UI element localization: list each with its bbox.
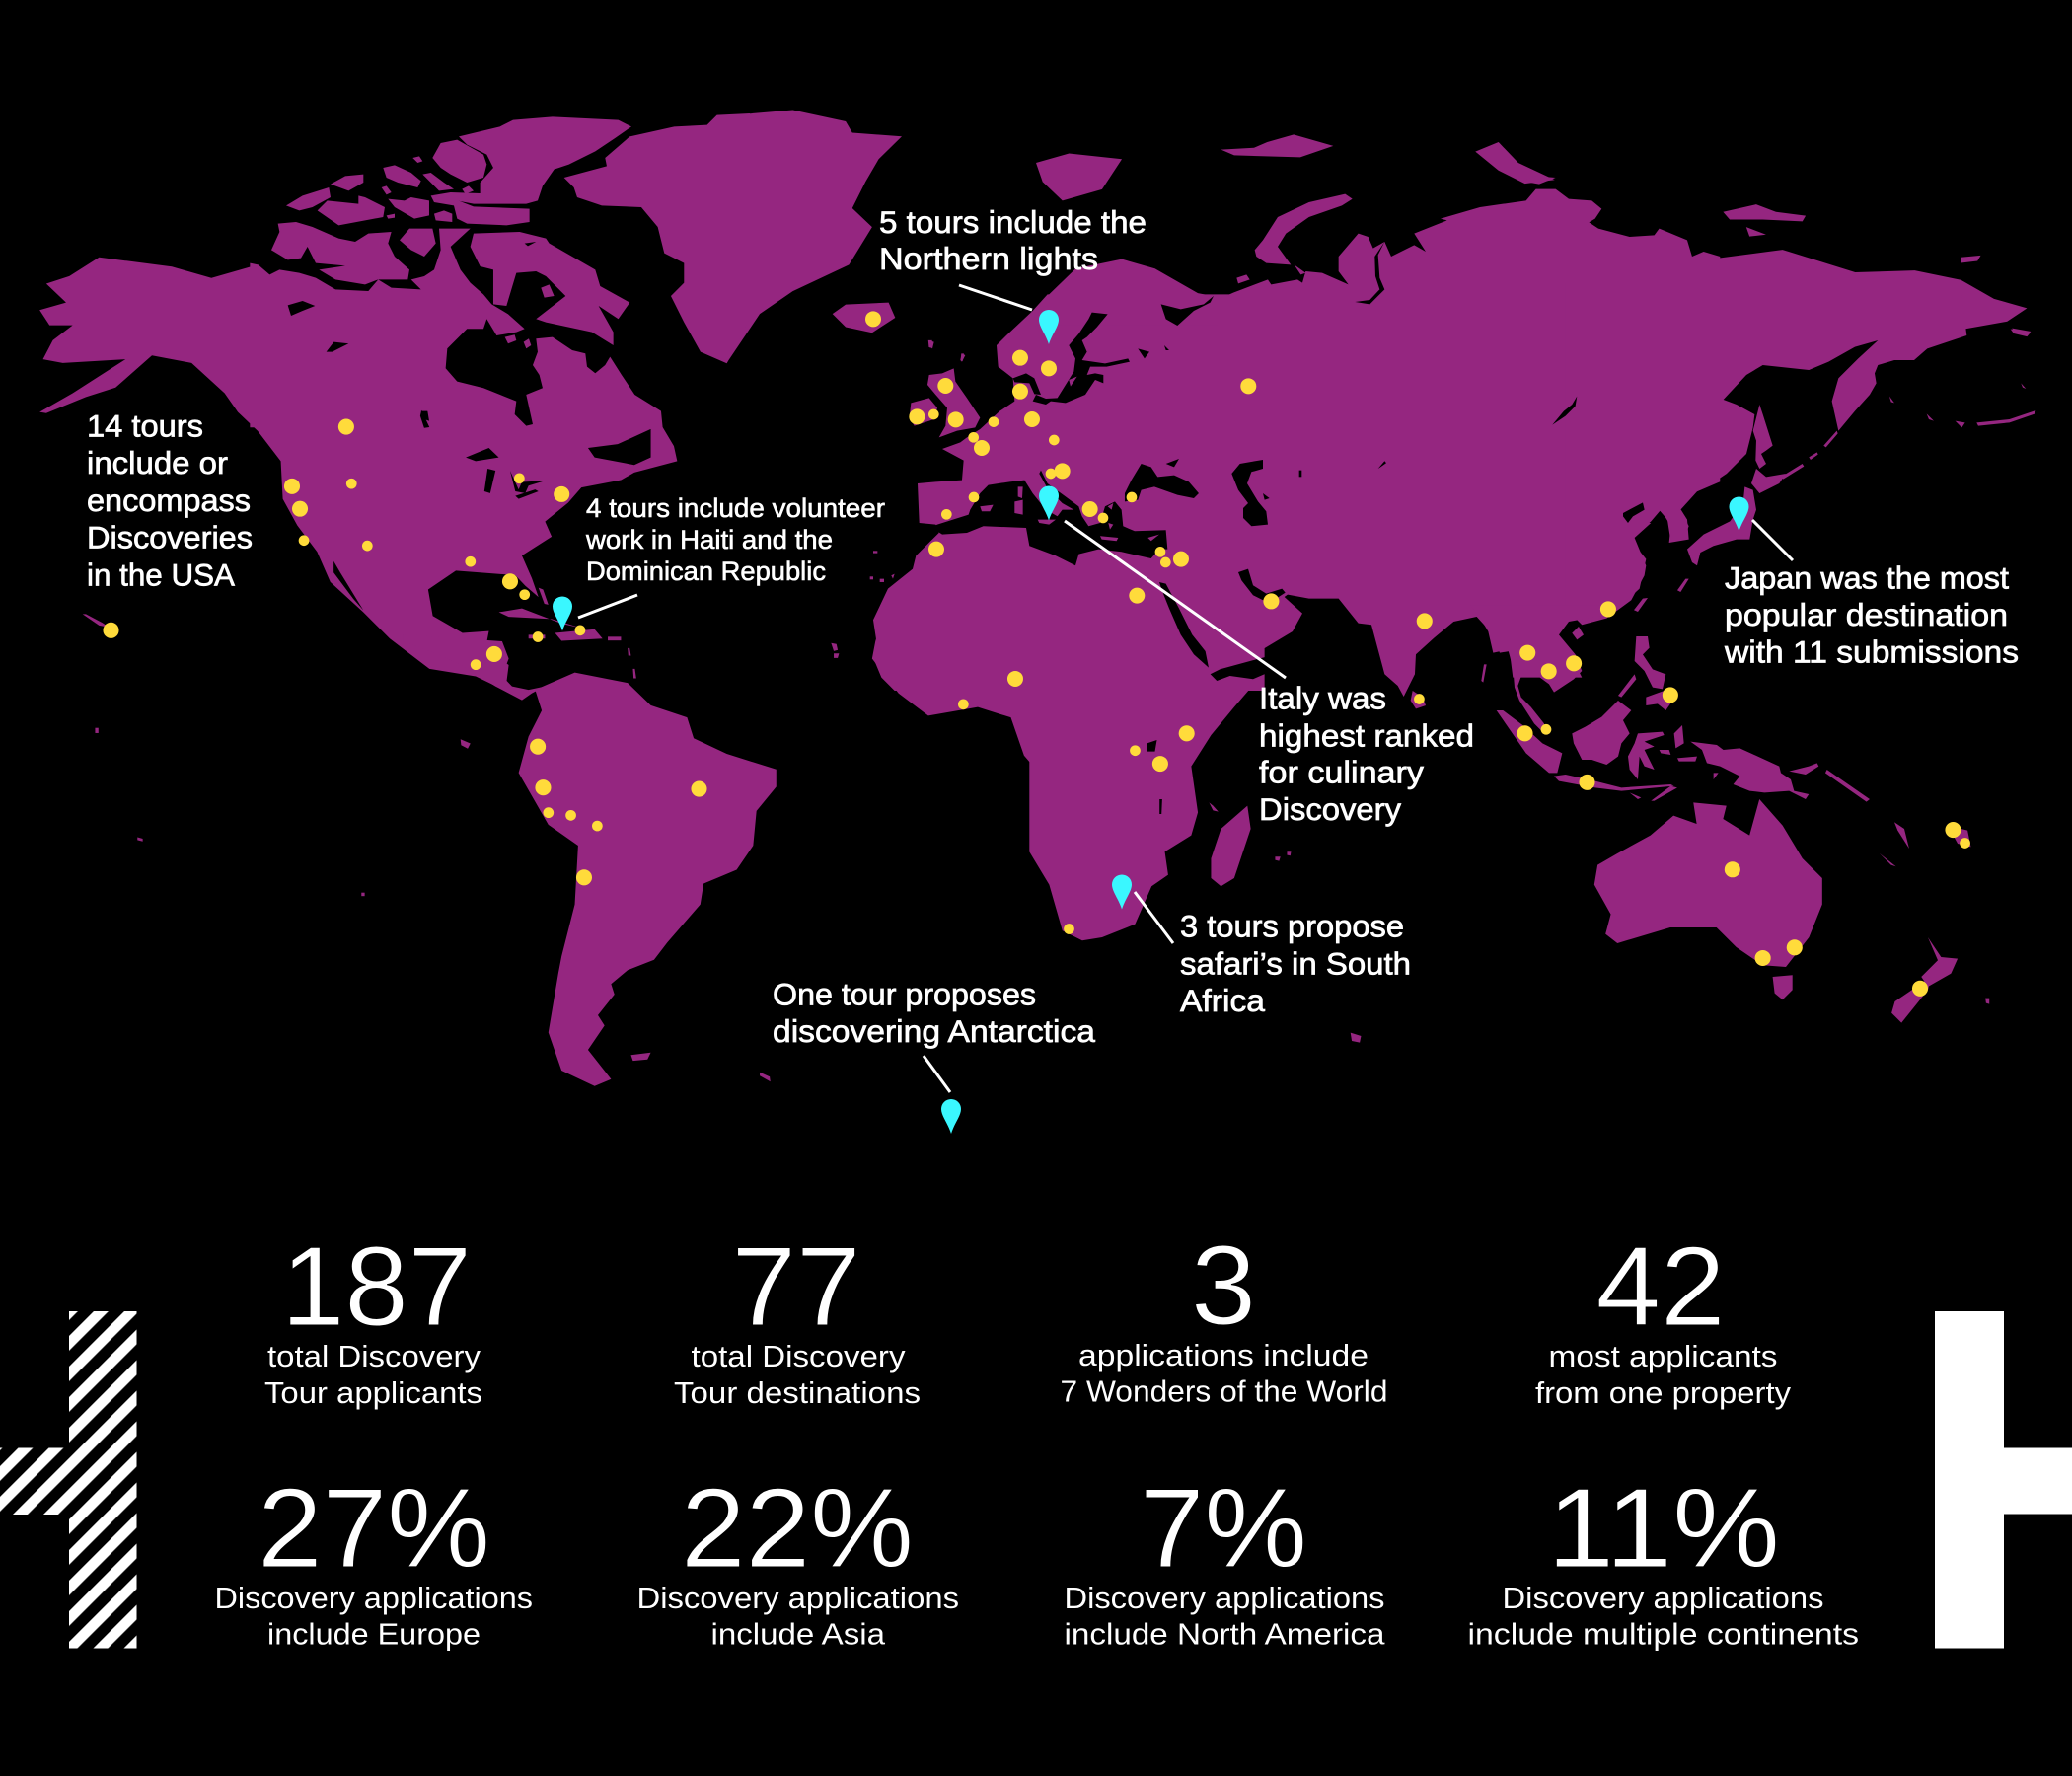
callout: South Africa: Africa: [1180, 983, 1266, 1018]
stat: 27% Europe: 27%: [258, 1466, 490, 1591]
callout: South Africa: [1112, 874, 1411, 1018]
callout: Japan: Japan was the most: [1725, 560, 2009, 596]
stat: 7% North America: 7%: [1140, 1466, 1307, 1591]
dots: Americas, Africa, Asia, Oceania: [103, 419, 1970, 997]
stat: 11% multiple continents: [1468, 1466, 1859, 1652]
small Mediterranean islands and Gotland: [980, 377, 1159, 541]
Yellow Sea detail: [1623, 502, 1645, 523]
callout: Japan: with 11 submissions: [1724, 633, 2019, 669]
callout: Northern lights: [879, 204, 1147, 344]
callout: USA: Discoveries: [87, 519, 253, 555]
Southeast Asia and Indonesia: [1470, 605, 1909, 866]
main Asia: [1217, 176, 1720, 697]
callout: USA: in the USA: [87, 556, 235, 592]
stat: 3 Wonders: applications include: [1078, 1339, 1369, 1372]
callout: USA: encompass: [87, 482, 251, 518]
callout: Haiti and Dominican Republic: work in Haiti and the: [585, 525, 833, 555]
callout: South Africa: 3 tours propose: [1180, 908, 1404, 943]
callout: Haiti and Dominican Republic: 4 tours include volunteer: [586, 493, 885, 523]
callout: Antarctica: discovering Antarctica: [773, 1013, 1096, 1049]
stat: 7% North America: Discovery applications: [1064, 1582, 1385, 1615]
stat: 42 from one property: from one property: [1535, 1376, 1792, 1410]
Far East, Japan: [1566, 283, 2035, 612]
African lake: [1147, 740, 1162, 814]
stat: 3 Wonders: 3: [1191, 1223, 1256, 1349]
land masses: [39, 110, 2035, 1086]
callout: Antarctica: One tour proposes: [773, 977, 1036, 1012]
North America mainland and Greenland east: [39, 110, 964, 691]
callout: Antarctica: [773, 977, 1096, 1134]
stat: 3 Wonders: [1060, 1223, 1387, 1409]
stat: 187 applicants: [264, 1224, 482, 1410]
callout: Northern lights: Northern lights: [879, 241, 1098, 276]
callout: Italy: highest ranked: [1259, 718, 1474, 754]
east Africa, Madagascar, Australia south, New Zealand: [1029, 641, 1989, 1043]
callout: Northern lights: 5 tours include the: [879, 204, 1147, 240]
Asia inland seas and gulfs: [1231, 242, 1577, 600]
stat: 77 destinations: total Discovery: [691, 1340, 906, 1373]
stat: 42 from one property: most applicants: [1549, 1340, 1778, 1373]
callout: USA: [87, 408, 253, 592]
statistics: [215, 1223, 1859, 1652]
seas and lakes: [288, 242, 1645, 814]
stat: 42 from one property: 42: [1596, 1224, 1725, 1350]
North America lakes and gulfs: [333, 410, 651, 611]
stat: 27% Europe: Discovery applications: [215, 1582, 533, 1615]
stat: 22% Asia: include Asia: [710, 1618, 885, 1652]
callout: South Africa: safari’s in South: [1180, 945, 1411, 981]
stat: 187 applicants: total Discovery: [267, 1340, 481, 1373]
stat: 22% Asia: [637, 1466, 959, 1652]
stat: 77 destinations: Tour destinations: [674, 1376, 921, 1410]
stat: 22% Asia: 22%: [681, 1466, 914, 1591]
callout: USA: include or: [87, 445, 228, 481]
Scandinavia north and far north-east Siberia, Arctic islands: [1036, 134, 2031, 336]
stat: 22% Asia: Discovery applications: [637, 1582, 959, 1615]
stat: 11% multiple continents: include multiple continents: [1468, 1618, 1859, 1652]
stat: 7% North America: include North America: [1064, 1618, 1385, 1652]
dots: Europe and Middle East: [865, 311, 1256, 687]
Canada lakes: [288, 242, 536, 421]
stat: 187 applicants: 187: [281, 1224, 472, 1350]
stat: 27% Europe: include Europe: [267, 1618, 481, 1652]
stat: 77 destinations: 77: [732, 1224, 860, 1350]
logo: striped half H, left: [0, 1311, 136, 1648]
world map: [39, 110, 2035, 1086]
callout: Italy: [1039, 485, 1474, 827]
callout: Haiti and Dominican Republic: Dominican Republic: [586, 556, 826, 586]
stat: 187 applicants: Tour applicants: [264, 1376, 482, 1410]
stat: 7% North America: [1064, 1466, 1385, 1652]
callout: Haiti and Dominican Republic: [553, 493, 885, 631]
South America and west Africa: [95, 607, 1044, 1086]
Europe, north Africa and the Middle East: [870, 294, 1265, 691]
stat: 77 destinations: [674, 1224, 921, 1410]
stat: 11% multiple continents: Discovery applications: [1502, 1582, 1823, 1615]
Arctic Canada and west Greenland: [250, 113, 750, 427]
stat: 11% multiple continents: 11%: [1547, 1466, 1780, 1591]
stat: 27% Europe: [215, 1466, 533, 1652]
Europe and Middle East seas: [930, 296, 1295, 681]
callout: Italy: Discovery: [1259, 791, 1401, 827]
logo: solid half H, right: [1935, 1311, 2072, 1648]
stat: 42 from one property: [1535, 1224, 1792, 1410]
stat: 3 Wonders: 7 Wonders of the World: [1060, 1375, 1387, 1409]
callout: Japan: [1724, 497, 2019, 669]
destination dots: [103, 311, 1970, 997]
callout: Italy: Italy was: [1259, 681, 1386, 716]
callout: Japan: popular destination: [1725, 597, 2008, 632]
callout: Italy: for culinary: [1259, 754, 1424, 789]
callout: USA: 14 tours: [87, 408, 203, 444]
